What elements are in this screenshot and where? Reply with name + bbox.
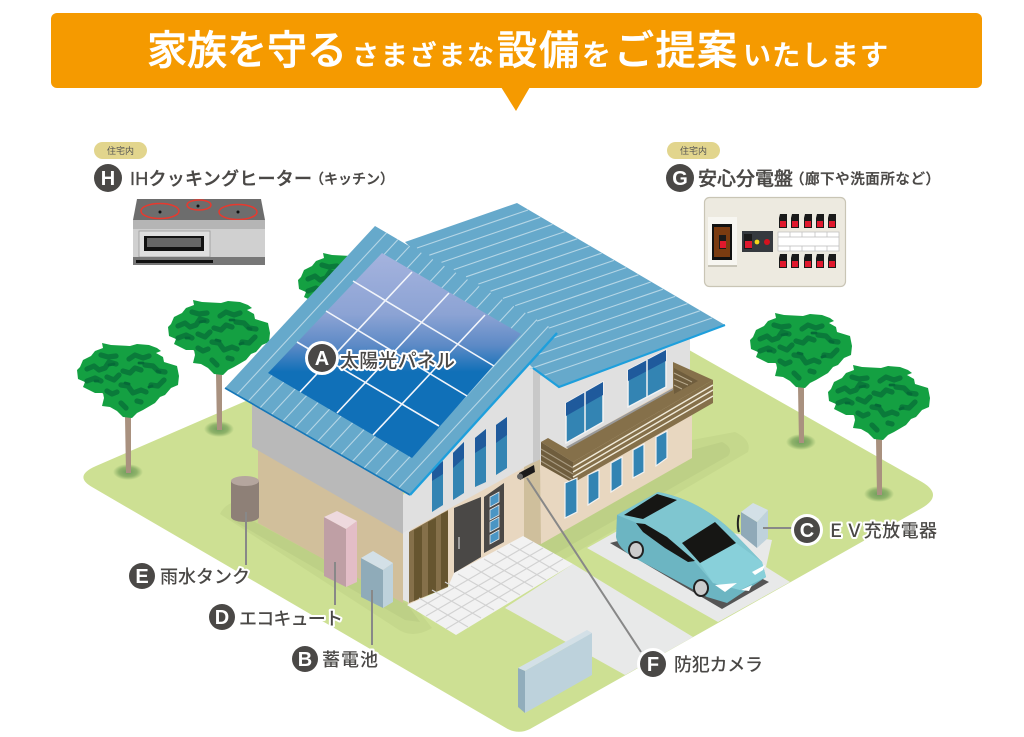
security camera	[517, 465, 535, 480]
driveway path	[505, 564, 693, 675]
label G: distribution board: 住宅内	[680, 145, 707, 156]
rain tank	[231, 476, 259, 522]
label H: IH cooking heater: 住宅内	[107, 145, 134, 156]
label D: EcoCute: エコキュート	[239, 609, 343, 629]
label G: distribution board: G	[672, 168, 688, 190]
lower right windows	[565, 431, 667, 518]
tree: behind roof	[298, 253, 400, 390]
house	[252, 330, 713, 635]
label H: IH cooking heater	[94, 142, 394, 192]
corner column	[526, 365, 541, 476]
tall front windows	[432, 417, 507, 512]
distribution board illustration	[704, 198, 846, 286]
upper window right	[628, 350, 666, 407]
label B: storage battery: B	[298, 649, 312, 671]
title text: 家族を守る	[147, 29, 347, 73]
label D: EcoCute: D	[215, 607, 229, 629]
tree: right	[750, 313, 852, 450]
label H: IH cooking heater: IHクッキングヒーター	[130, 169, 312, 189]
title banner	[51, 13, 982, 111]
left wall	[258, 440, 403, 603]
label C: EV charger: ＥＶ充放電器	[827, 521, 937, 541]
car shadow	[610, 530, 769, 609]
label A: solar panel: A	[315, 348, 329, 370]
title text: いたします	[743, 40, 888, 71]
label E: rain tank: 雨水タンク	[160, 567, 250, 587]
title text: を	[582, 40, 611, 72]
label G: distribution board: （廊下や洗面所など）	[790, 171, 940, 188]
label E: rain tank	[129, 563, 250, 589]
back roof	[405, 203, 725, 387]
corner column lower	[524, 459, 541, 545]
label C: EV charger: C	[800, 520, 814, 542]
balcony inner shadow	[566, 388, 673, 452]
right upper wall	[540, 330, 690, 470]
upper window left	[566, 382, 603, 443]
EcoCute unit	[324, 511, 357, 587]
balcony	[541, 362, 713, 483]
label G: distribution board	[666, 142, 940, 192]
lawn ground	[83, 270, 933, 732]
tree: far left	[77, 343, 179, 480]
label A: solar panel	[305, 341, 455, 375]
title text: 設備	[497, 29, 579, 73]
label B: storage battery: 蓄電池	[322, 650, 378, 670]
label C: EV charger	[791, 514, 937, 546]
garden wall	[518, 630, 592, 713]
label F: security camera: F	[647, 654, 659, 676]
IH cooktop illustration	[133, 199, 265, 265]
electric car	[616, 492, 766, 603]
label H: IH cooking heater: （キッチン）	[310, 171, 394, 187]
white corner trim	[403, 529, 410, 603]
front roof	[225, 226, 557, 495]
title text: ご提案	[614, 29, 737, 73]
gray soffit band	[252, 400, 403, 534]
label F: security camera	[637, 648, 763, 680]
label D: EcoCute	[209, 604, 343, 630]
label G: distribution board: 安心分電盤	[698, 168, 793, 190]
door side window	[484, 483, 504, 553]
title text: さまざまな	[352, 40, 494, 71]
front entry wall	[403, 466, 527, 606]
tree: left	[168, 300, 270, 437]
ground shadows along the house	[220, 432, 749, 634]
tile entrance	[407, 536, 573, 635]
label B: storage battery	[292, 646, 378, 672]
parking pad	[587, 507, 790, 622]
label H: IH cooking heater: H	[101, 168, 115, 190]
right lower wall	[540, 376, 692, 544]
solar panel array	[268, 253, 521, 458]
label E: rain tank: E	[135, 566, 149, 588]
title text	[147, 29, 888, 73]
label A: solar panel: 太陽光パネル	[340, 350, 455, 372]
leader lines	[246, 478, 800, 652]
wooden entry fins	[409, 510, 448, 603]
tree: far right	[828, 365, 930, 502]
storage battery unit	[361, 551, 393, 608]
front door	[454, 497, 481, 573]
EV charger	[738, 503, 768, 548]
label F: security camera: 防犯カメラ	[674, 655, 763, 675]
front gable wall	[403, 360, 541, 540]
